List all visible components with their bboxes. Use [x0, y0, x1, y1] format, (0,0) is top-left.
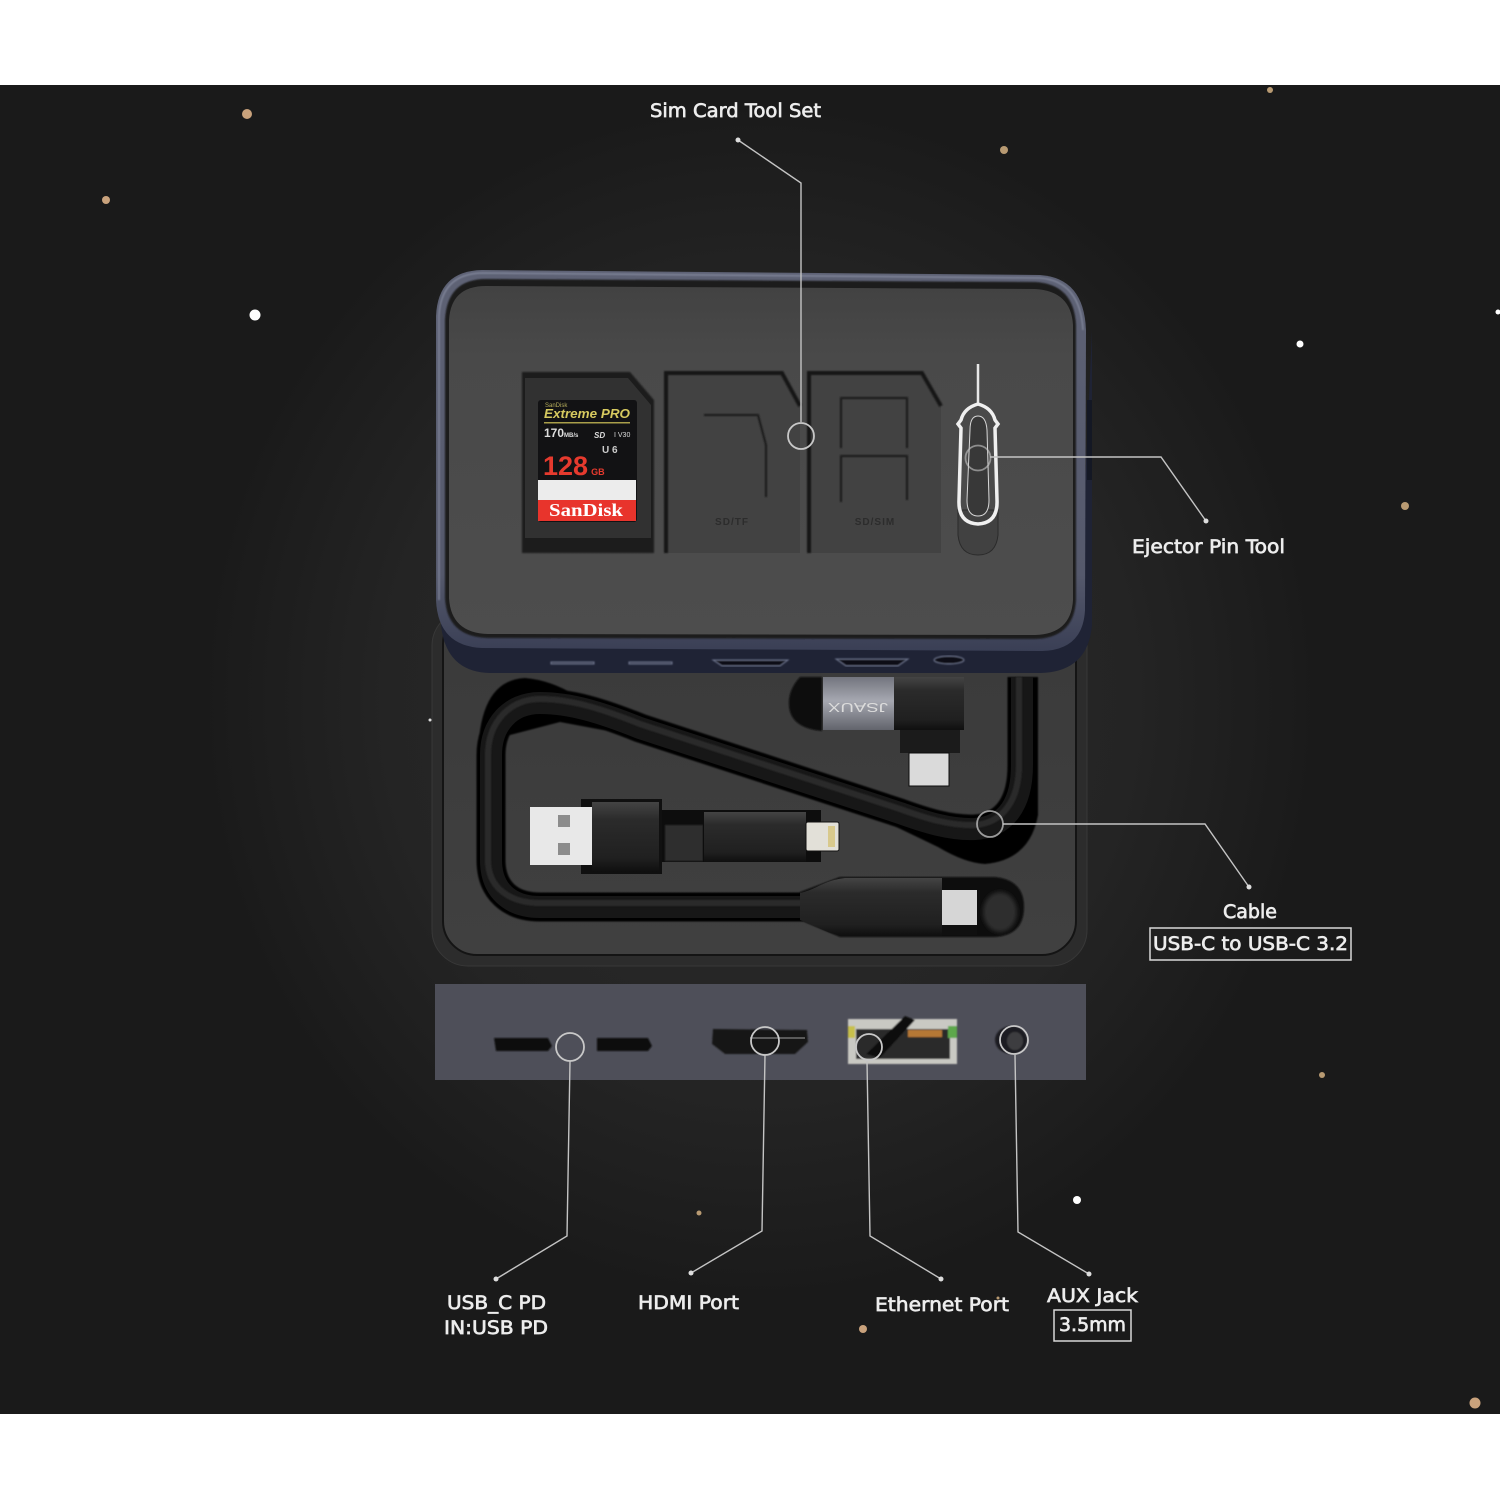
slot label: SD/SIM	[855, 517, 895, 528]
lid rim highlight	[439, 273, 1083, 600]
callout: Ethernet Port: Ethernet Port	[875, 1295, 1009, 1316]
SD card: SanDisk	[545, 403, 568, 409]
cable cavity	[478, 677, 1038, 937]
background glow	[200, 100, 1320, 1300]
callout: Ethernet Port	[856, 1034, 1009, 1316]
plug brand: JSAUX	[828, 700, 888, 715]
callout: HDMI Port: HDMI Port	[638, 1293, 739, 1314]
SD card: SD	[594, 431, 605, 440]
ejector pin slot	[958, 510, 998, 555]
SD card: SanDisk	[549, 500, 623, 520]
callout: USB_C PD: USB_C PD	[447, 1293, 546, 1314]
callout: Cable	[977, 811, 1351, 960]
callout: Ejector Pin Tool: Ejector Pin Tool	[1132, 537, 1285, 558]
callout: Cable: Cable	[1223, 902, 1277, 923]
SD card: Extreme PRO	[544, 406, 630, 421]
SD card	[525, 378, 651, 538]
SD card: 170MB/s	[544, 426, 579, 440]
lid channel	[445, 279, 1076, 639]
callout: Ejector Pin Tool	[966, 446, 1285, 558]
callout: HDMI Port	[638, 1027, 779, 1314]
SD card: 128 GB	[543, 451, 605, 481]
port panel	[435, 984, 1086, 1080]
Ethernet port	[848, 1016, 957, 1064]
SD card: I V30	[614, 432, 630, 439]
AUX jack	[995, 1026, 1027, 1054]
lower tray with cables	[432, 610, 1087, 966]
lid tray	[449, 286, 1073, 635]
SD card: U 6	[602, 445, 618, 456]
callout: AUX Jack	[1000, 1026, 1138, 1341]
callout: AUX Jack: AUX Jack	[1047, 1286, 1138, 1307]
USB-C port left	[494, 1038, 552, 1051]
SD/SIM slot	[808, 372, 941, 553]
tray outer shell	[432, 610, 1087, 966]
ejector pin tool	[958, 364, 998, 524]
slot label: SD/TF	[715, 517, 749, 528]
angled USB-C plug upper	[823, 677, 964, 786]
callout: Sim Card Tool Set: Sim Card Tool Set	[650, 101, 821, 122]
lid underside band with ports	[441, 330, 1092, 673]
USB-A to Lightning adapter	[530, 799, 839, 874]
SD slot	[522, 372, 654, 553]
lid with card slots	[436, 270, 1092, 673]
tray inner floor	[443, 610, 1076, 955]
callout: Cable: USB-C to USB-C 3.2	[1153, 934, 1348, 955]
callout: USB_C PD: IN:USB PD	[444, 1318, 548, 1339]
USB-C port right	[597, 1038, 652, 1051]
callout: AUX Jack: 3.5mm	[1059, 1315, 1126, 1336]
SD/TF slot	[665, 372, 800, 553]
plug cavity highlight	[983, 892, 1017, 932]
lid side ports	[551, 656, 964, 666]
lid rim	[436, 270, 1086, 651]
callout: USB_C PD	[444, 1033, 584, 1339]
USB-C cable	[488, 677, 1022, 907]
callout: Sim Card Tool Set	[650, 101, 821, 449]
USB-C plug lower	[800, 878, 977, 936]
HDMI port	[712, 1029, 808, 1054]
side dark edge	[1087, 400, 1092, 480]
